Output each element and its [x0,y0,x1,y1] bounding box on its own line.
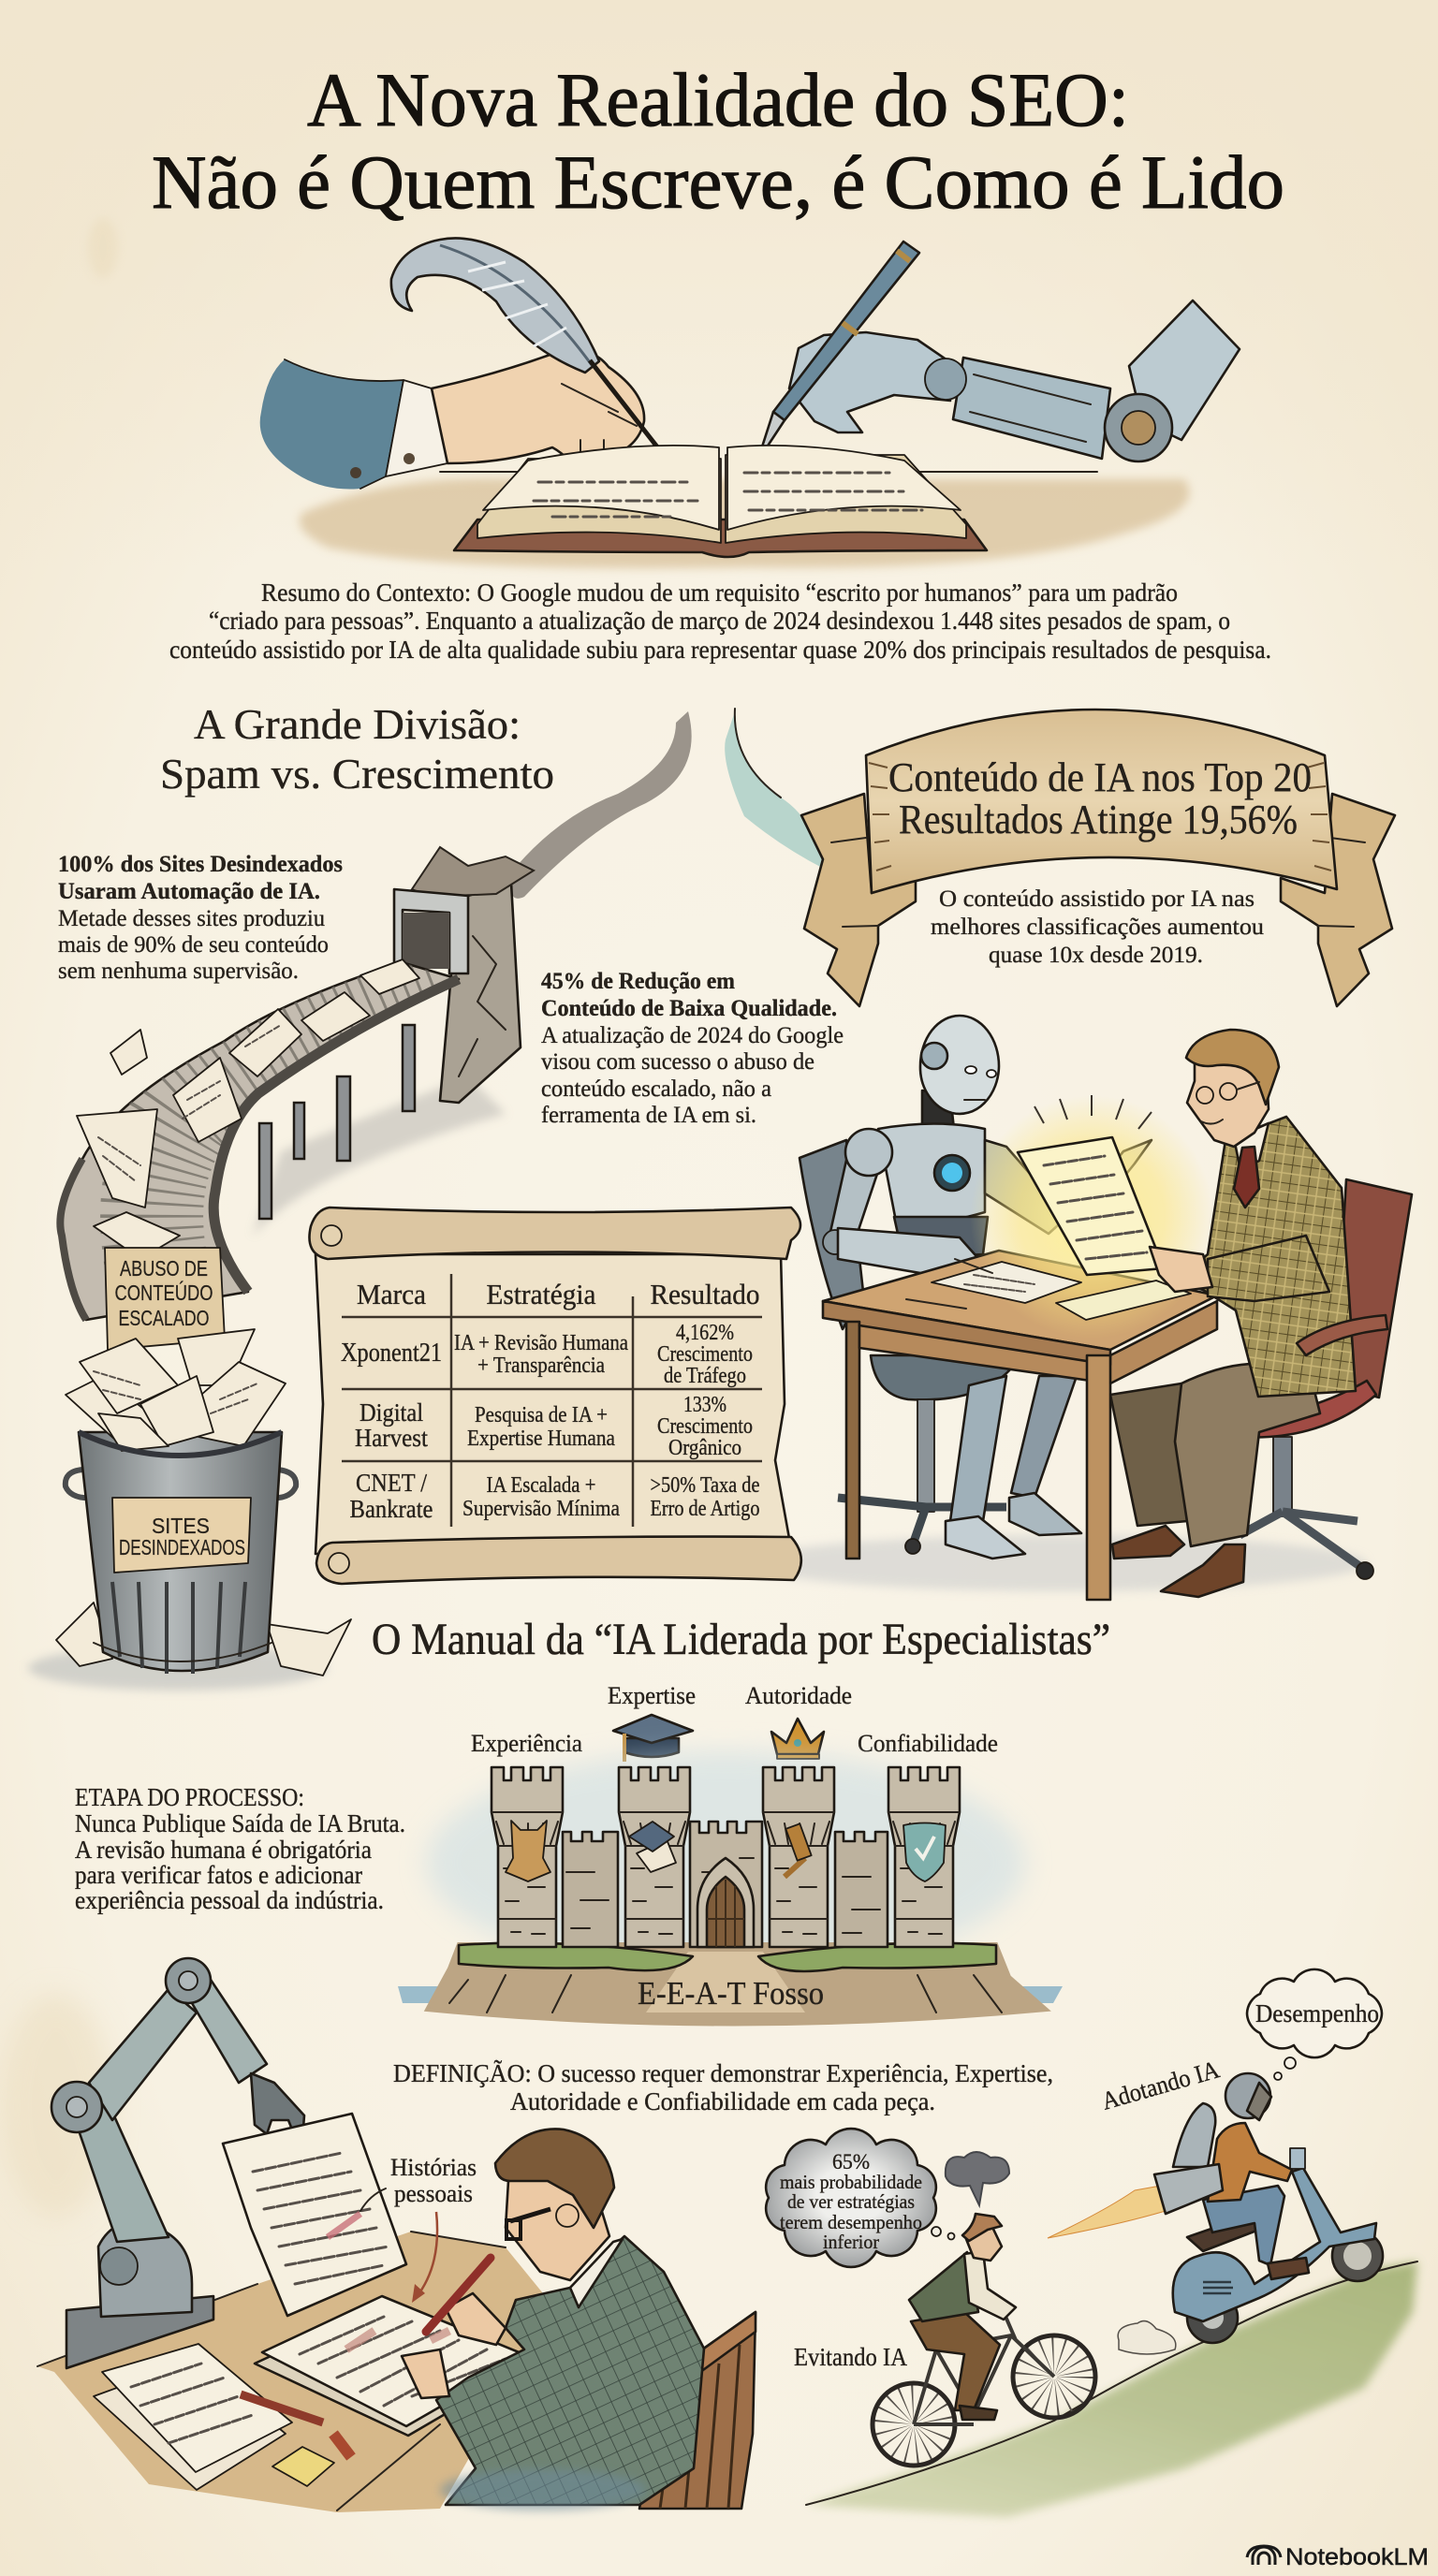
icon: man's head [1186,1030,1279,1147]
heading: a grande divisão: Spam vs. Crescimento [160,750,554,798]
hill [398,1943,1063,2024]
icon: owl on tower [506,1821,550,1881]
NotebookLM logo: NotebookLM [1285,2544,1429,2570]
text: definição: Autoridade e Confiabilidade em cada peça. [510,2087,935,2115]
thought cloud: 65%: 65% [832,2150,870,2174]
table row: Digital Harvest: Digital [360,1398,423,1427]
table row: Digital Harvest: Expertise Humana [467,1427,615,1451]
icon: table [823,1251,1217,1559]
table row: Xponent21: IA + Revisão Humana [454,1331,628,1355]
table scroll [309,1208,801,1584]
icon: graduation cap [613,1715,693,1762]
table row: Xponent21: Crescimento [657,1342,753,1367]
icon: discarded sheets [56,1603,351,1676]
table row: CNET / Bankrate: >50% Taxa de [650,1473,760,1498]
rider [1203,2073,1309,2279]
icon: man's trousers and shoes [1110,1364,1320,1597]
label: abuso de conteúdo escalado [105,1248,225,1350]
text: etapa do processo: experiência pessoal da indústria. [75,1886,384,1914]
table row: CNET / Bankrate: Supervisão Mínima [462,1497,620,1521]
thought cloud: 65%: terem desempenho [780,2211,922,2233]
heading: o manual: O Manual da “IA Liderada por Especialistas” [372,1615,1110,1664]
table row: Digital Harvest: Harvest [355,1424,428,1452]
callout: histórias pessoais [360,2154,477,2303]
text: 45% redução: conteúdo escalado, não a [541,1076,771,1102]
table row: CNET / Bankrate: Bankrate [350,1495,433,1523]
text: 100% desindexados: Usaram Automação de IA. [58,879,320,904]
text: definição: DEFINIÇÃO: O sucesso requer demonstrar Experiência, Expertise, [393,2059,1053,2087]
table row: Xponent21: + Transparência [477,1354,605,1378]
context summary: conteúdo assistido por IA de alta qualidade subiu para representar quase 20% dos principais resultados de pesquisa. [169,636,1271,664]
hero illustration: human hand and robot hand writing in a book [260,238,1240,568]
table row: Digital Harvest: Pesquisa de IA + [475,1403,608,1427]
rider [909,2214,1016,2420]
left paper stack, pen and sticky note [94,2344,351,2490]
desk [37,2232,555,2512]
flame [1048,2186,1166,2238]
banner: conteúdo de IA: Conteúdo de IA nos Top 20 [888,754,1312,800]
title: A Nova Realidade do SEO: [307,57,1129,142]
context summary: “criado para pessoas”. Enquanto a atualização de março de 2024 desindexou 1.448 sites pesados de spam, o [209,607,1230,635]
text: 45% redução [541,969,844,1128]
robot and expert at table [749,1016,1412,1600]
text: 45% redução: Conteúdo de Baixa Qualidade. [541,996,837,1021]
icon: shield on tower [903,1823,946,1881]
icon: man's hand [1150,1247,1212,1292]
table row: Digital Harvest: 133% [683,1393,726,1417]
icon: glow and glowing paper [970,1095,1213,1339]
icon: conveyor belt [60,962,459,1320]
text: 100% desindexados: sem nenhuma supervisão. [58,959,299,984]
icon: table front leg [1087,1355,1110,1600]
icon: human sleeve and hand [260,350,644,489]
icon: robot arm with pen [757,242,1240,461]
robotic arm [51,1958,304,2368]
icon: conveyor legs [259,1025,415,1219]
icon: papers on the belt [77,959,419,1259]
icon: robot chair [800,1140,1020,1554]
text: conteúdo assistido 10x: O conteúdo assistido por IA nas [939,886,1255,912]
cyclist [873,2214,1095,2466]
trash can [28,1329,351,1690]
heading: a grande divisão: A Grande Divisão: [194,700,521,748]
title [152,57,1284,225]
ribbon body [866,710,1337,893]
callout: histórias pessoais: pessoais [394,2180,473,2207]
icon: gavel on tower [785,1823,812,1877]
text: 45% redução: visou com sucesso o abuso de [541,1049,814,1075]
table row: Xponent21: 4,162% [676,1321,734,1345]
text: definição [393,2059,1053,2115]
text: etapa do processo: A revisão humana é obrigatória [75,1836,372,1864]
icon: crown [771,1719,824,1759]
banner: conteúdo de IA [801,710,1395,1006]
wheels [1187,2231,1383,2343]
icon: man's chair arm [1297,1315,1387,1355]
table header [357,1278,760,1310]
thought cloud: 65%: inferior [823,2231,879,2253]
text: 45% redução: 45% de Redução em [541,969,735,994]
E-E-A-T labels: Expertise [608,1682,696,1709]
hanging sheet [223,2114,406,2316]
human review illustration [37,1958,756,2512]
label: sites desindexados: SITES [152,1514,210,1538]
castle illustration [398,1750,1063,2024]
label: abuso de conteúdo escalado: ESCALADO [118,1306,210,1330]
label: sites desindexados: DESINDEXADOS [119,1535,245,1559]
table header: Estratégia [487,1278,596,1310]
text: 45% redução: A atualização de 2024 do Google [541,1023,844,1048]
icon: stone machine [394,847,534,1103]
text: etapa do processo: ETAPA DO PROCESSO: [75,1783,304,1811]
icon: quill [391,238,672,466]
context summary [169,578,1271,664]
hill [806,2261,1417,2517]
label: abuso de conteúdo escalado: ABUSO DE [120,1256,208,1281]
text: 45% redução: ferramenta de IA em si. [541,1103,756,1128]
table rules [342,1274,762,1527]
table row: CNET / Bankrate [350,1469,760,1523]
text: conteúdo assistido 10x [931,886,1265,968]
icon: man's red chair [1235,1179,1412,1579]
table row: Xponent21: Xponent21 [341,1339,442,1368]
thought cloud: desempenho [1247,1969,1382,2080]
thought cloud: desempenho: Desempenho [1255,1999,1379,2027]
table row: Xponent21 [341,1321,753,1388]
table row: CNET / Bankrate: IA Escalada + [487,1473,595,1498]
E-E-A-T labels: Experiência [471,1730,582,1757]
icon: desk papers and pencil [906,1259,1191,1320]
conveyor illustration [60,847,534,1320]
context summary: Resumo do Contexto: O Google mudou de um requisito “escrito por humanos” para um padrão [261,578,1178,607]
icon: robot body [823,1016,1152,1281]
chair [639,2312,756,2509]
table header: Marca [357,1278,426,1310]
arrow: to paper [360,2188,386,2211]
text: etapa do processo [75,1783,405,1914]
scooter body [1173,2148,1376,2321]
arrow: teal growth branch [725,709,824,869]
table row: Digital Harvest: Crescimento [657,1414,753,1439]
bicycle [873,2312,1095,2466]
reviewer [402,2129,704,2510]
open notebook [255,2296,532,2436]
arrow: grey spam branch [512,711,692,899]
icon: paper pile [66,1329,286,1451]
thought cloud: 65% [766,2129,955,2267]
label: E-E-A-T fosso: E-E-A-T Fosso [638,1975,824,2012]
banner: conteúdo de IA: Resultados Atinge 19,56% [899,797,1298,842]
icon: can body [66,1432,296,1674]
towers [492,1767,960,1947]
icon: man's jacket [1175,1117,1356,1397]
text: 100% desindexados [58,852,343,984]
table row: CNET / Bankrate: CNET / [356,1469,427,1497]
label: evitando IA: Evitando IA [794,2343,907,2371]
icon: flying paper scrap [110,1030,147,1075]
scooter rider [1048,2073,1383,2343]
scroll parchment [315,1254,792,1554]
table header: Resultado [650,1278,760,1310]
table row: CNET / Bankrate: Erro de Artigo [650,1497,760,1521]
label: abuso de conteúdo escalado: CONTEÚDO [114,1281,213,1305]
thought cloud: 65%: mais probabilidade [780,2171,922,2193]
text: etapa do processo: Nunca Publique Saída de IA Bruta. [75,1809,405,1837]
table row: Digital Harvest: Orgânico [668,1436,741,1460]
icon: dust cloud [1118,2321,1176,2354]
text: conteúdo assistido 10x: melhores classificações aumentou [931,915,1265,940]
jetpack [1154,2103,1223,2214]
icon: robot legs [946,1376,1081,1559]
text: 100% desindexados: 100% dos Sites Desindexados [58,852,343,877]
arrow: to notebook [412,2212,437,2303]
thought cloud: 65%: de ver estratégias [787,2190,915,2213]
callout: histórias pessoais: Histórias [390,2154,477,2181]
text: 100% desindexados: mais de 90% de seu conteúdo [58,932,329,958]
table row: Digital Harvest [355,1393,753,1460]
text: etapa do processo: para verificar fatos e adicionar [75,1861,362,1889]
walls [563,1822,888,1947]
text: 100% desindexados: Metade desses sites produziu [58,906,325,931]
E-E-A-T labels: Autoridade [745,1682,852,1709]
title: Não é Quem Escreve, é Como é Lido [152,139,1284,225]
label: adotando IA: Adotando IA [1098,2055,1223,2115]
icon: storm cloud [946,2152,1009,2205]
E-E-A-T labels [471,1682,998,1757]
label: sites desindexados [112,1498,251,1573]
ribbon tails [801,794,1395,1006]
table row: Xponent21: de Tráfego [664,1364,746,1388]
E-E-A-T labels: Confiabilidade [858,1730,998,1757]
icon: cap and diploma on tower [629,1822,676,1872]
heading: a grande divisão [160,700,554,798]
icon: open book [454,446,987,557]
text: conteúdo assistido 10x: quase 10x desde 2019. [989,943,1203,968]
icon: notebooklm mark [1247,2546,1281,2565]
